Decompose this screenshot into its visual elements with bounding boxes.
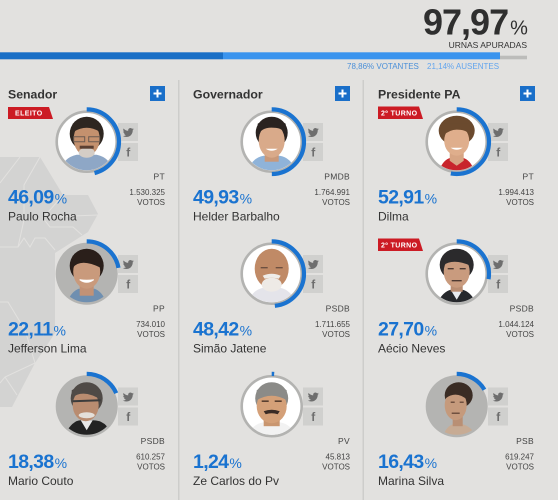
candidate: Ze Carlos do Pv [193, 374, 351, 488]
elected ribbon: ELEITO [15, 110, 43, 118]
votes: VOTOS [137, 462, 165, 472]
votes [498, 320, 535, 339]
party: PSB [516, 436, 534, 446]
turnout legend [347, 62, 499, 71]
votes: VOTOS [137, 198, 165, 207]
portrait with result ring [239, 109, 304, 174]
social buttons [488, 255, 508, 293]
votes: VOTOS [322, 462, 350, 472]
candidate: Helder Barbalho [193, 109, 351, 223]
panel: Senador [8, 86, 166, 488]
votes: VOTOS [506, 198, 534, 207]
candidate: Mario Couto [8, 374, 166, 488]
panel: Governador [193, 86, 351, 488]
party: PT [154, 172, 165, 182]
votes: 45.813 [326, 452, 351, 462]
name: Jefferson Lima [8, 341, 87, 355]
panel: Presidente PA [378, 86, 535, 488]
plus button [150, 86, 165, 101]
percentage: 49,93% [193, 186, 252, 208]
portrait with result ring [424, 241, 489, 306]
header: polls counted [0, 2, 528, 71]
social buttons [303, 388, 323, 426]
progress bar [0, 52, 527, 59]
name: Dilma [378, 209, 409, 223]
portrait with result ring [239, 241, 304, 306]
name: Marina Silva [378, 474, 444, 488]
runoff ribbon, second candidate [378, 238, 423, 251]
social buttons: f [311, 410, 316, 424]
heading: Senador [8, 88, 57, 102]
percentage: 52,91% [378, 186, 437, 208]
portrait with result ring [54, 374, 119, 438]
votes: 610.257 [136, 452, 166, 462]
party: PSDB [510, 304, 534, 314]
votes [498, 188, 535, 207]
percentage: 18,38% [8, 451, 67, 473]
elected ribbon [8, 107, 53, 119]
social buttons [118, 123, 138, 161]
social buttons: f [126, 146, 131, 160]
votes [136, 320, 166, 339]
votes: VOTOS [322, 198, 350, 207]
runoff ribbon, second candidate: 2º TURNO [381, 242, 418, 250]
name: Paulo Rocha [8, 209, 77, 223]
votes: VOTOS [506, 462, 534, 472]
candidate: Dilma [378, 109, 535, 223]
name: Simão Jatene [193, 341, 267, 355]
votes [314, 188, 351, 207]
candidate: Aécio Neves [378, 241, 535, 355]
background map of Pará [0, 157, 98, 407]
social buttons [118, 388, 138, 426]
social buttons: f [311, 146, 316, 160]
party: PV [338, 436, 350, 446]
turnout legend: 78,86% VOTANTES [347, 62, 419, 71]
runoff ribbon [378, 106, 423, 119]
portrait with result ring [54, 109, 119, 174]
candidate: Marina Silva [378, 374, 535, 488]
votes: 1.044.124 [498, 320, 535, 329]
social buttons [488, 123, 508, 161]
votes [315, 320, 351, 339]
percentage: 16,43% [378, 451, 437, 473]
party: PT [523, 172, 534, 182]
social buttons [303, 123, 323, 161]
social buttons [488, 388, 508, 426]
candidate: Paulo Rocha [8, 109, 166, 223]
headline percentage: 97,97% [423, 2, 528, 42]
plus button [520, 86, 535, 101]
percentage: 46,09% [8, 186, 67, 208]
party: PMDB [324, 172, 350, 182]
percentage: 48,42% [193, 318, 252, 340]
votes [136, 452, 166, 472]
plus button [335, 86, 350, 101]
votes: 734.010 [136, 320, 166, 329]
name: Aécio Neves [378, 341, 445, 355]
votes [129, 188, 166, 207]
candidate: Jefferson Lima [8, 241, 166, 355]
party: PP [153, 304, 165, 314]
social buttons: f [496, 146, 501, 160]
social buttons: f [311, 278, 316, 292]
votes [505, 452, 535, 472]
votes: 1.764.991 [314, 188, 351, 197]
name: Helder Barbalho [193, 209, 280, 223]
candidate: Simão Jatene [193, 241, 351, 355]
portrait with result ring [54, 241, 119, 306]
social buttons: f [126, 410, 131, 424]
votes: 619.247 [505, 452, 535, 462]
votes: 1.994.413 [498, 188, 535, 197]
portrait with result ring [424, 109, 489, 174]
turnout legend: 21,14% AUSENTES [427, 62, 499, 71]
votes: VOTOS [322, 330, 350, 339]
name: Ze Carlos do Pv [193, 474, 279, 488]
votes: 1.530.325 [129, 188, 166, 197]
social buttons [303, 255, 323, 293]
votes: 1.711.655 [315, 320, 351, 329]
votes [322, 452, 351, 472]
name: Mario Couto [8, 474, 74, 488]
social buttons: f [496, 410, 501, 424]
runoff ribbon: 2º TURNO [381, 110, 418, 118]
social buttons: f [496, 278, 501, 292]
social buttons [118, 255, 138, 293]
portrait with result ring [424, 374, 489, 438]
urnas apuradas label: URNAS APURADAS [449, 40, 527, 50]
party: PSDB [326, 304, 350, 314]
portrait with result ring [239, 374, 304, 438]
votes: VOTOS [137, 330, 165, 339]
percentage: 1,24% [193, 451, 242, 473]
party: PSDB [141, 436, 165, 446]
heading: Presidente PA [378, 88, 461, 102]
social buttons: f [126, 278, 131, 292]
column dividers [178, 80, 364, 500]
percentage: 22,11% [8, 318, 66, 340]
heading: Governador [193, 88, 263, 102]
percentage: 27,70% [378, 318, 437, 340]
votes: VOTOS [506, 330, 534, 339]
